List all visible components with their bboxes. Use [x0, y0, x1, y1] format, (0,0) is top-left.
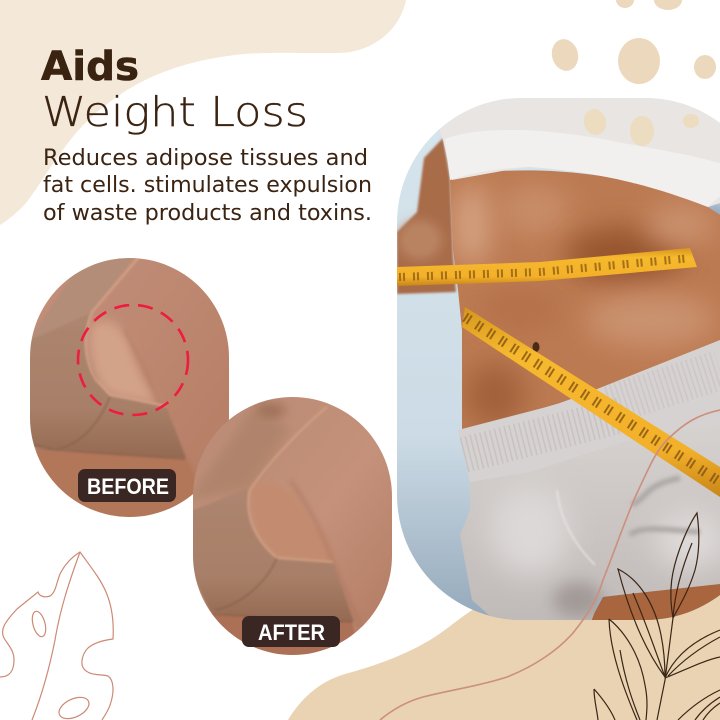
- shorts waistband: [458, 340, 720, 482]
- label: before: [78, 469, 176, 502]
- description text: fat cells. stimulates expulsion: [43, 172, 372, 198]
- decorative curve: [380, 410, 720, 720]
- underarm skin: [258, 490, 318, 557]
- title: [41, 44, 308, 136]
- white crop top: [440, 98, 720, 207]
- underarm area: [90, 321, 160, 405]
- decorative dots: over photo: [581, 107, 699, 146]
- lower skin strip: [592, 584, 720, 620]
- white shorts: [460, 425, 720, 620]
- photo: waist with measuring tape: [397, 85, 720, 630]
- neck shadow: [258, 403, 286, 417]
- measuring tape: hip: [462, 307, 720, 497]
- photo: before: [25, 250, 235, 522]
- dashed red circle: [78, 305, 188, 415]
- measuring tape: waist: [397, 248, 697, 286]
- title: Aids: [41, 44, 139, 90]
- label: after: [242, 616, 340, 647]
- navel: [532, 342, 540, 352]
- bra: [188, 488, 354, 622]
- background shape: top-left cream blob: [0, 0, 406, 225]
- background shape: bottom-right tan blob: [288, 570, 720, 720]
- description text: [43, 145, 372, 226]
- lower skin: [36, 450, 194, 517]
- bra: [25, 313, 186, 458]
- torso skin: [450, 170, 720, 429]
- label: before: BEFORE: [87, 474, 169, 499]
- arm crease: [126, 335, 140, 359]
- decorative dots: top right: [548, 0, 716, 84]
- description text: of waste products and toxins.: [43, 200, 372, 226]
- botanical leaves: [594, 513, 720, 720]
- photo: after: [188, 392, 398, 660]
- description text: Reduces adipose tissues and: [43, 145, 368, 171]
- arm and hand: [397, 138, 456, 294]
- title: Weight Loss: [42, 88, 308, 136]
- label: after: AFTER: [258, 620, 325, 645]
- monstera leaf outline: [0, 552, 113, 720]
- chest shade: [198, 408, 286, 496]
- lower skin: [211, 612, 354, 655]
- chest skin: [32, 258, 131, 338]
